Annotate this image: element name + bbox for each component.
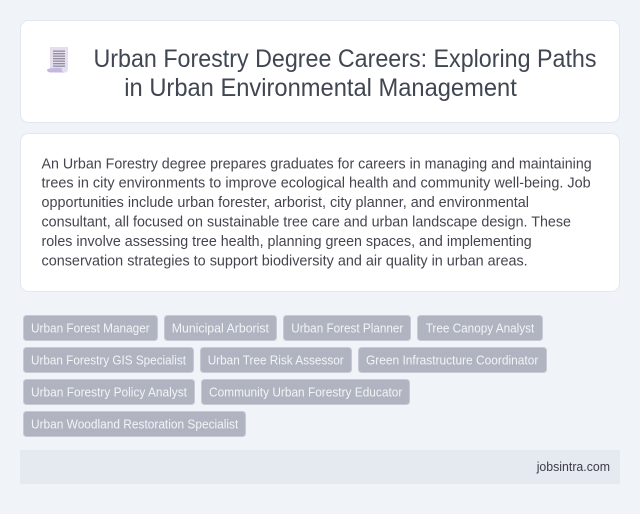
tag: Urban Forest Manager — [31, 320, 150, 336]
tag — [24, 348, 194, 372]
tag — [200, 348, 352, 372]
tag: Urban Tree Risk Assessor — [208, 352, 344, 368]
tag — [24, 380, 194, 404]
text block: description: conservation strategies to support biodiversity and air quality in urban areas. — [42, 253, 528, 269]
text block: description: An Urban Forestry degree prepares graduates for careers in managing and maintaining — [42, 156, 592, 172]
tag — [24, 316, 158, 340]
tag: Municipal Arborist — [172, 320, 269, 336]
panel: description — [20, 134, 620, 292]
tag: Tree Canopy Analyst — [426, 320, 535, 336]
footer: jobsintra.com — [536, 459, 610, 474]
tag: Urban Forest Planner — [291, 320, 404, 336]
tag: Community Urban Forestry Educator — [209, 384, 403, 400]
tag — [418, 316, 542, 340]
footer — [20, 450, 620, 484]
tag — [24, 412, 246, 436]
tag: Urban Forestry GIS Specialist — [31, 352, 186, 368]
tag — [284, 316, 410, 340]
tag: Urban Forestry Policy Analyst — [31, 384, 187, 400]
tag — [202, 380, 410, 404]
text block: description: roles involve assessing tree health, planning green spaces, and implementing — [42, 234, 532, 250]
text block: description: opportunities include urban forester, arborist, city planner, and environmental — [42, 195, 529, 211]
tag — [164, 316, 276, 340]
text block: description: consultant, all focused on sustainable tree care and urban landscape design. These — [42, 214, 571, 230]
tag: Urban Woodland Restoration Specialist — [31, 416, 239, 432]
icon: document scroll — [47, 47, 68, 72]
tag: Green Infrastructure Coordinator — [366, 352, 539, 368]
title: in Urban Environmental Management — [124, 75, 517, 102]
panel: title card — [20, 20, 620, 122]
tag list: careers — [24, 316, 546, 436]
tag — [358, 348, 546, 372]
title: Urban Forestry Degree Careers: Exploring Paths — [94, 46, 596, 73]
text block: description: trees in city environments to improve ecological health and community well-being. Job — [42, 176, 591, 192]
title — [94, 46, 596, 102]
text block: description — [42, 156, 592, 269]
